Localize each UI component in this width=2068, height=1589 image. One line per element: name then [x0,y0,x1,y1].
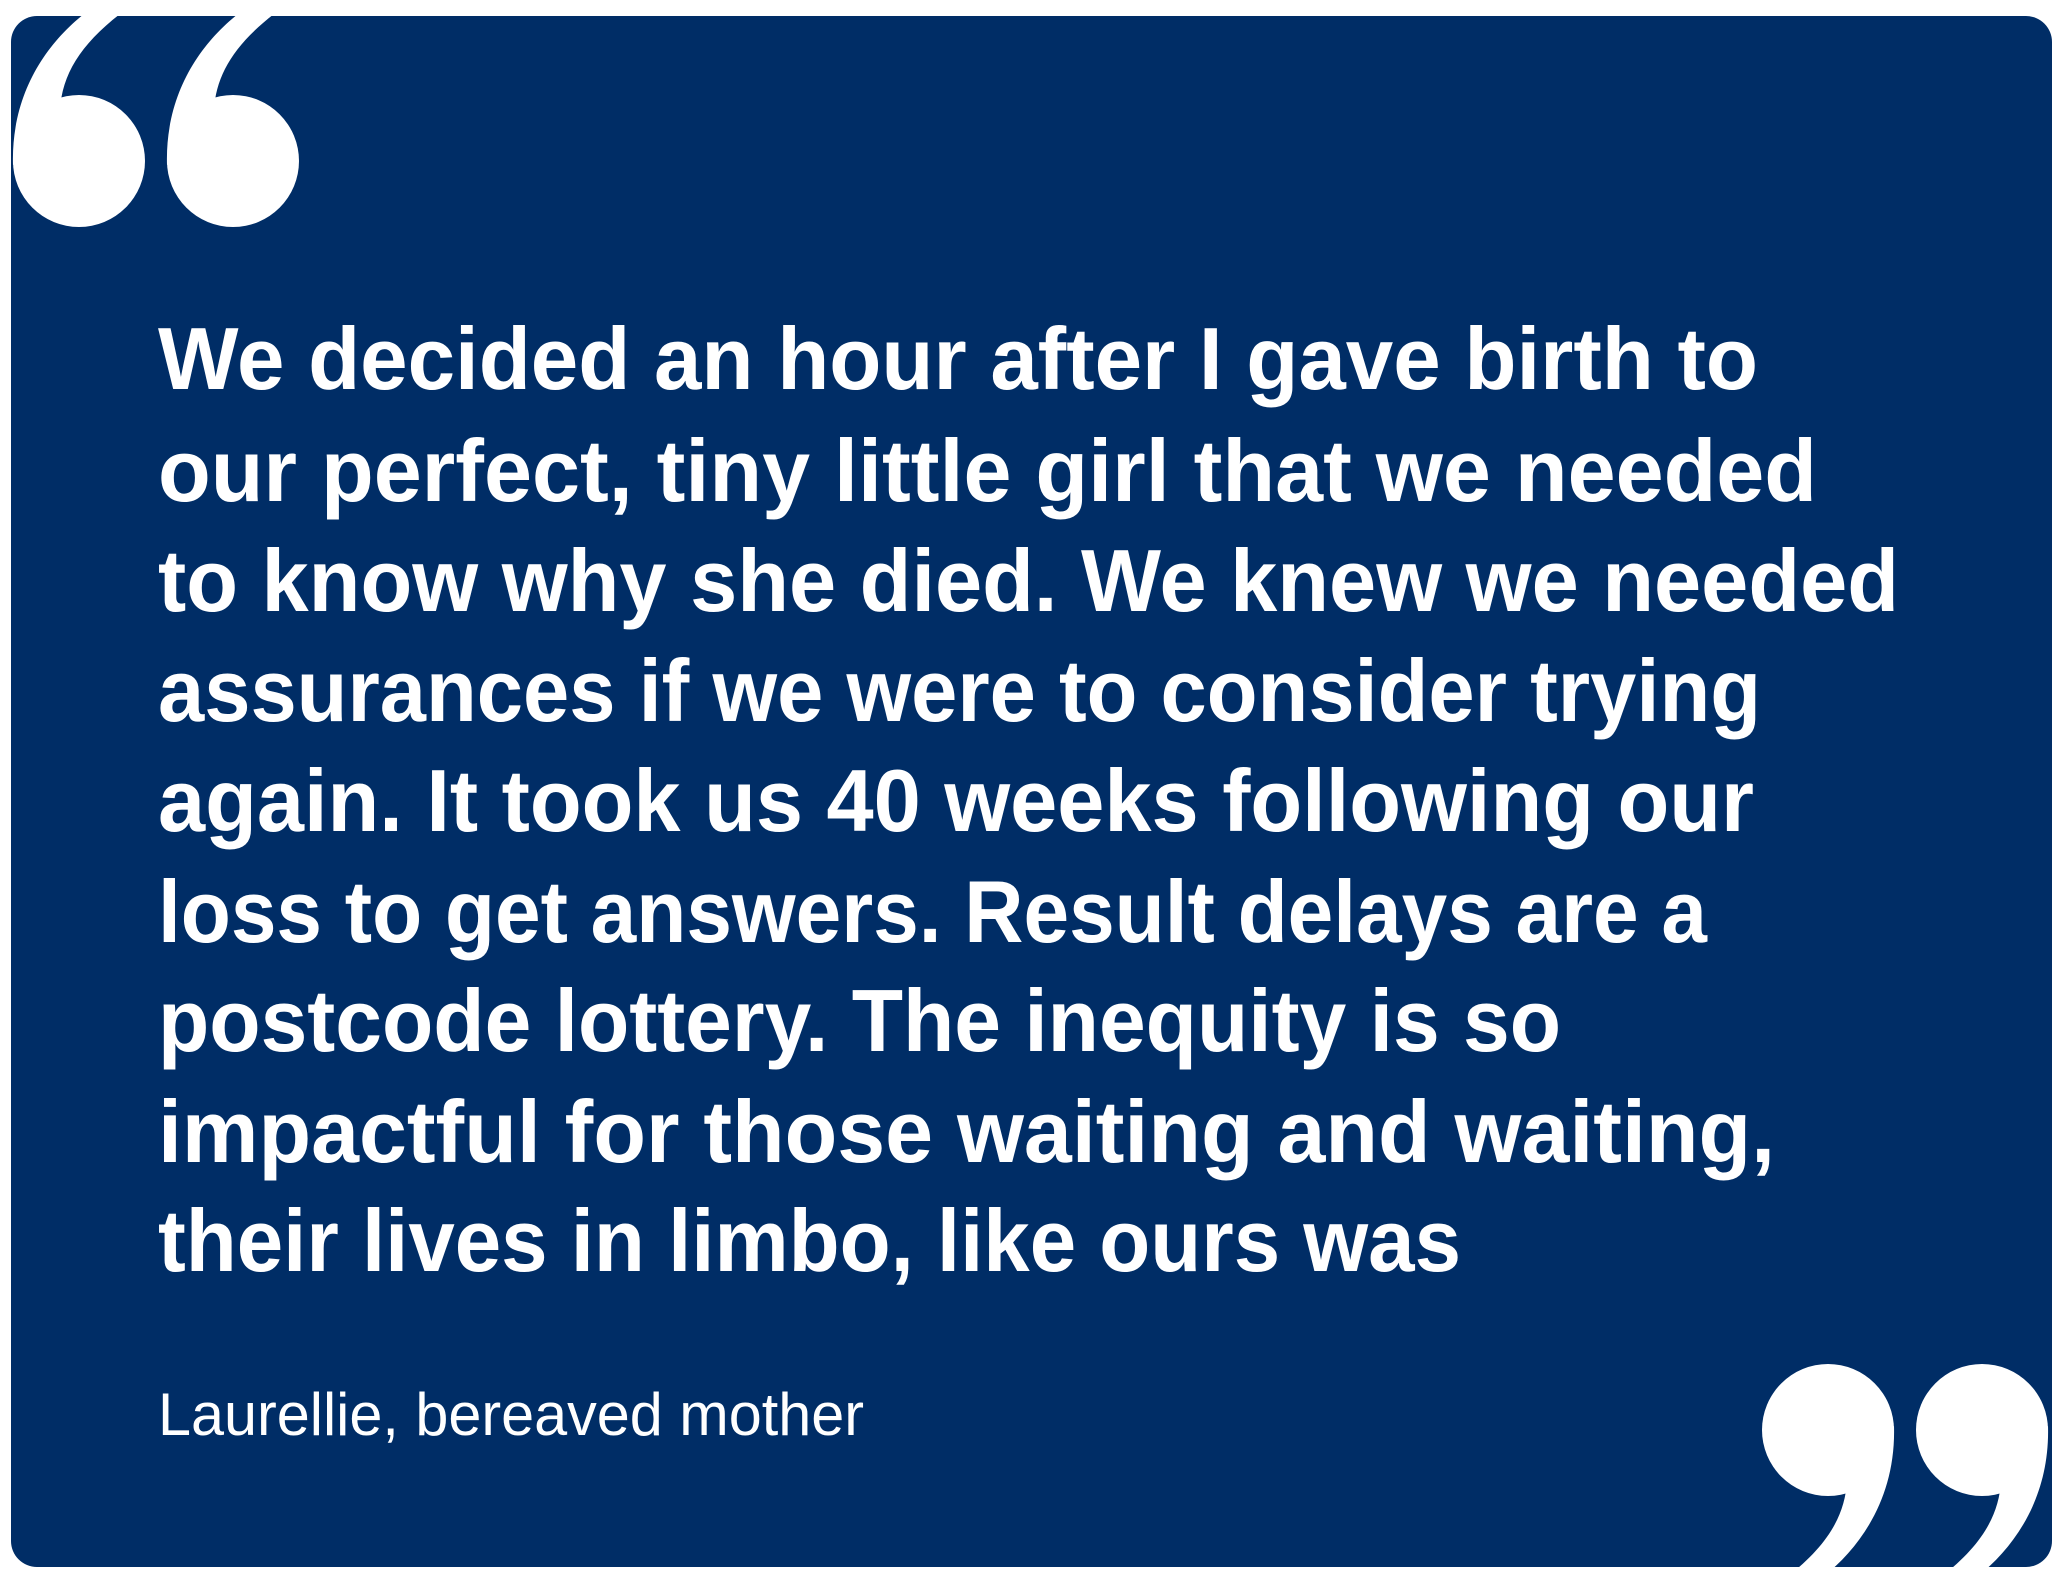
icon: opening quote marks [13,14,299,227]
quote text: our perfect, tiny little girl that we needed [158,421,1817,520]
quote text: their lives in limbo, like ours was [158,1191,1461,1290]
icon: closing quote marks [1762,1364,2048,1577]
quote text: to know why she died. We knew we needed [158,531,1899,630]
quote text [158,309,1899,1290]
quote text: postcode lottery. The inequity is so [158,971,1561,1070]
quote text: We decided an hour after I gave birth to [158,309,1758,408]
quote text: impactful for those waiting and waiting, [158,1082,1775,1181]
attribution: Laurellie, bereaved mother [158,1381,864,1448]
quote text: assurances if we were to consider trying [158,641,1761,740]
quote text: loss to get answers. Result delays are a [158,862,1708,961]
quote text: again. It took us 40 weeks following our [158,751,1754,850]
